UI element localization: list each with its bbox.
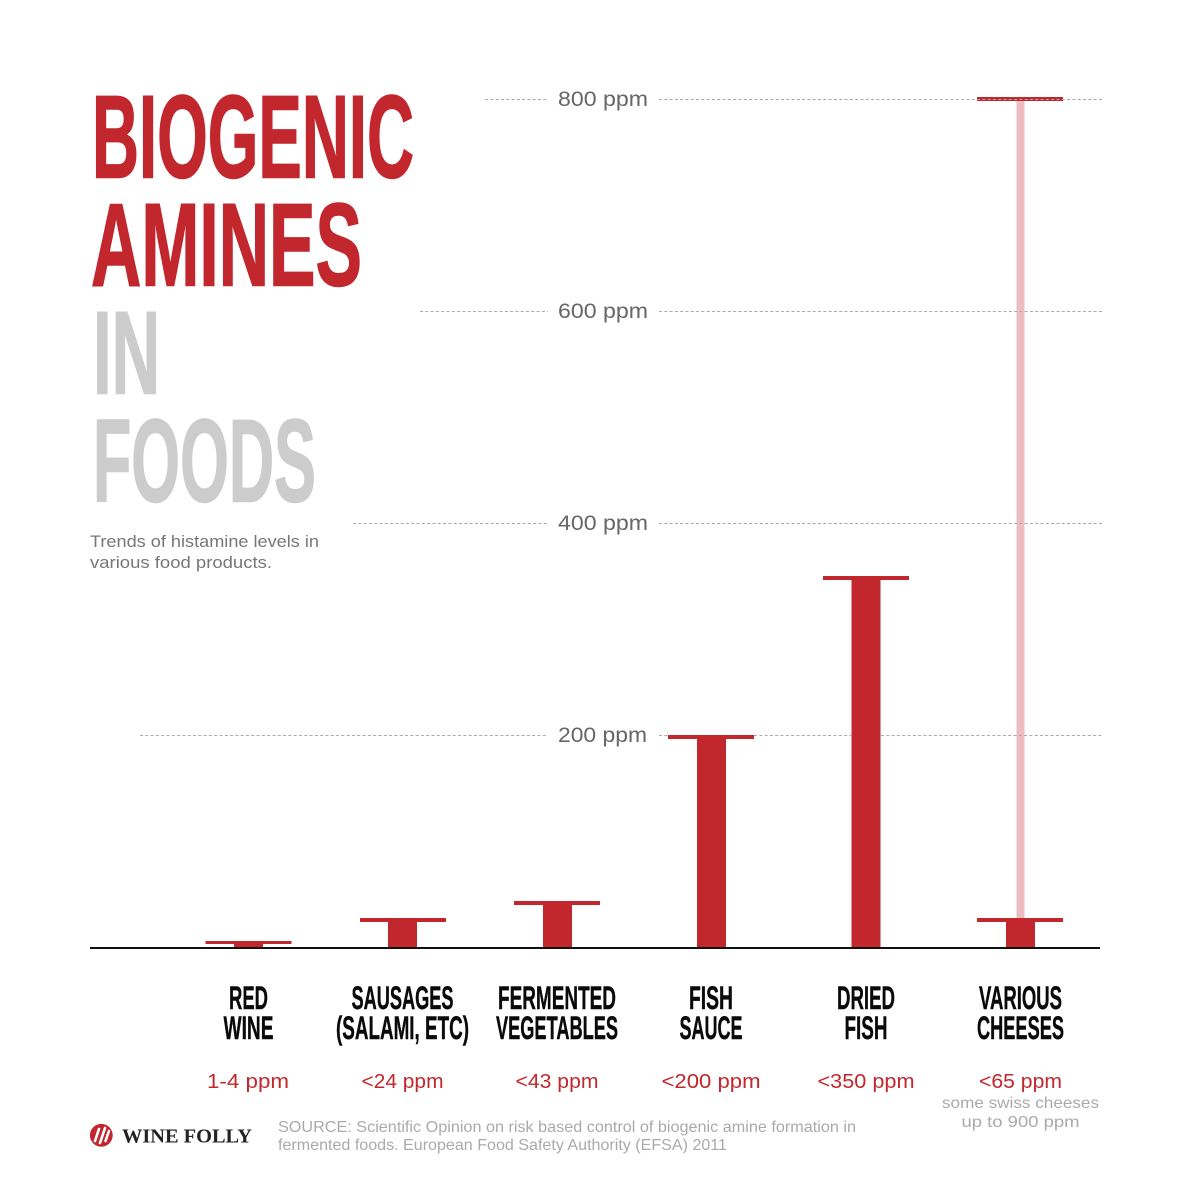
subtitle <box>90 532 319 572</box>
category labels: FERMENTED <box>498 980 616 1016</box>
category labels: FISH <box>844 1010 888 1046</box>
subtitle: Trends of histamine levels in <box>90 532 319 551</box>
ppm values: <43 ppm <box>516 1071 598 1093</box>
category labels <box>224 980 1064 1046</box>
cheese note: up to 900 ppm <box>962 1114 1080 1131</box>
category labels: (SALAMI, ETC) <box>336 1010 469 1046</box>
source note <box>278 1119 856 1154</box>
ppm values: <24 ppm <box>362 1071 444 1093</box>
bar: fish sauce <box>668 735 754 948</box>
title <box>91 72 414 528</box>
category labels: SAUSAGES <box>352 980 454 1016</box>
title: IN <box>93 288 160 420</box>
baseline axis <box>90 947 1100 949</box>
axis labels: 800 ppm <box>558 88 648 111</box>
icon: wine folly logo <box>90 1124 113 1147</box>
axis labels <box>558 88 648 747</box>
category labels: VEGETABLES <box>496 1010 618 1046</box>
ppm values: <65 ppm <box>979 1071 1062 1093</box>
subtitle: various food products. <box>90 553 272 572</box>
logo wordmark: WINE FOLLY <box>122 1126 253 1148</box>
chart gridlines <box>140 100 1102 736</box>
axis labels: 600 ppm <box>558 300 648 323</box>
axis labels: 200 ppm <box>558 724 647 747</box>
title: BIOGENIC <box>92 72 414 204</box>
source note: SOURCE: Scientific Opinion on risk based control of biogenic amine formation in <box>278 1119 856 1136</box>
axis labels: 400 ppm <box>558 512 648 535</box>
category labels: SAUCE <box>680 1010 742 1046</box>
category labels: DRIED <box>837 980 895 1016</box>
ppm values: <350 ppm <box>818 1071 914 1093</box>
category labels: FISH <box>689 980 733 1016</box>
bar: sausages <box>360 918 446 948</box>
ppm values <box>207 1071 1062 1093</box>
title: FOODS <box>93 396 316 528</box>
ppm values: 1-4 ppm <box>207 1071 289 1093</box>
bar: various cheeses <box>977 97 1063 948</box>
bar: red wine <box>206 941 292 948</box>
category labels: RED <box>229 980 268 1016</box>
category labels: WINE <box>224 1010 274 1046</box>
category labels: CHEESES <box>977 1010 1064 1046</box>
bar: dried fish <box>823 576 909 948</box>
category labels: VARIOUS <box>979 980 1062 1016</box>
cheese note: some swiss cheeses <box>942 1095 1099 1112</box>
bar: fermented vegetables <box>514 901 600 948</box>
source note: fermented foods. European Food Safety Authority (EFSA) 2011 <box>278 1137 727 1154</box>
title: AMINES <box>91 180 362 312</box>
ppm values: <200 ppm <box>662 1071 760 1093</box>
cheese note <box>942 1095 1099 1131</box>
